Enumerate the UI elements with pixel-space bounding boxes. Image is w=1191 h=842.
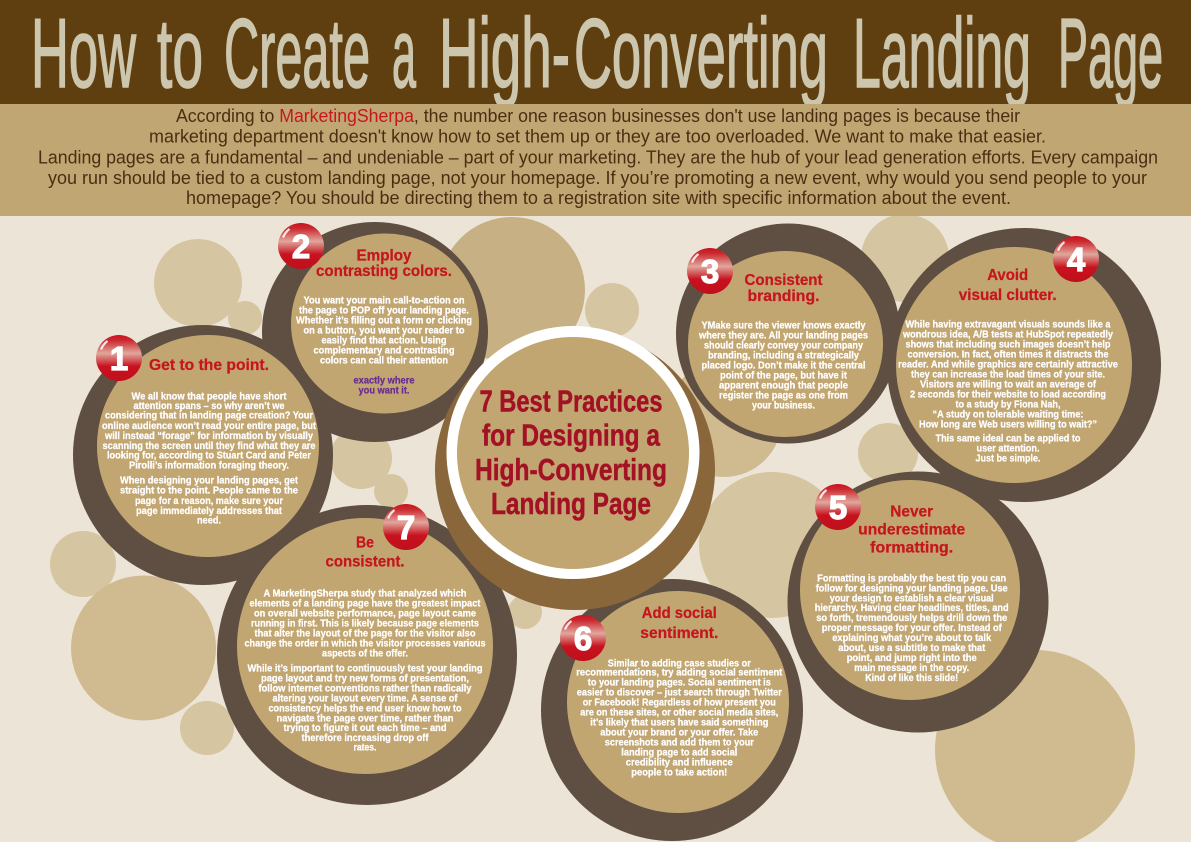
body text 5: hierarchy. Having clear headlines, titles, and bbox=[815, 603, 1009, 614]
body text 1: Pirolli’s information foraging theory. bbox=[129, 461, 289, 472]
body text 1: When designing your landing pages, get bbox=[120, 475, 299, 486]
body text 6: easier to discover – just search through Twitter bbox=[577, 688, 782, 699]
heading 2: contrasting colors. bbox=[316, 263, 452, 280]
body text 1: looking for, according to Stuart Card and Peter bbox=[107, 451, 311, 462]
heading 2: Employ bbox=[356, 248, 412, 265]
body text 4: 2 seconds for their website to load according bbox=[910, 390, 1106, 401]
body text 6: are on these sites, or other social media sites, bbox=[580, 708, 778, 719]
panel 4: avoid visual clutter bbox=[887, 228, 1161, 502]
body text 6: to your landing pages. Social sentiment is bbox=[588, 678, 771, 689]
badge 7: 7 bbox=[397, 509, 415, 546]
body text 3: your business. bbox=[752, 400, 815, 411]
body text 4 bbox=[898, 319, 1118, 465]
body text 6 bbox=[576, 659, 783, 779]
badge 1: 1 bbox=[110, 340, 128, 377]
heading 4: Avoid bbox=[987, 267, 1028, 284]
body text 4: This same ideal can be applied to bbox=[936, 434, 1080, 445]
central heading: Landing Page bbox=[491, 486, 651, 521]
badge 7 bbox=[383, 504, 429, 550]
body text 1: considering that in landing page creation? Your bbox=[105, 411, 313, 422]
body text 5: about, use a subtitle to make that bbox=[838, 643, 986, 654]
badge 1 bbox=[96, 335, 142, 381]
heading 7 bbox=[326, 534, 404, 571]
heading 6 bbox=[640, 605, 718, 642]
central heading: for Designing a bbox=[482, 418, 661, 453]
body text 3: apparent enough that people bbox=[719, 381, 848, 392]
body text 3 bbox=[698, 320, 868, 411]
body text 4: Visitors are willing to wait an average of bbox=[920, 380, 1097, 391]
body text 7: change the order in which the visitor processes various bbox=[244, 639, 486, 650]
background decorative bubbles bbox=[50, 214, 1135, 842]
body text 3: YMake sure the viewer knows exactly bbox=[702, 320, 866, 331]
body text 1: online audience won’t read your entire page, but bbox=[102, 421, 317, 432]
body text 7: consistency helps the end user know how to bbox=[268, 704, 462, 715]
body text 7: rates. bbox=[354, 743, 377, 754]
body text 1: attention spans – so why aren’t we bbox=[134, 401, 285, 412]
body text 7: navigate the page over time, rather than bbox=[276, 714, 454, 725]
intro text band: you run should be tied to a custom landing page, not your homepage. If you’re promoting a new event, why would you send people to your bbox=[48, 168, 1147, 188]
heading 5: Never bbox=[890, 504, 933, 521]
body text 7: follow internet conventions rather than radically bbox=[258, 684, 472, 695]
heading 1: Get to the point. bbox=[149, 357, 269, 374]
body text 5: explaining what you’re about to talk bbox=[832, 633, 992, 644]
panel 2: employ contrasting colors bbox=[262, 222, 488, 442]
body text 1: We all know that people have short bbox=[132, 391, 287, 402]
central heading bbox=[475, 384, 667, 521]
body text 5: your design to establish a clear visual bbox=[830, 594, 994, 605]
body text 2: easily find that action. Using bbox=[322, 335, 446, 346]
panel 1: get to the point bbox=[73, 325, 333, 585]
body text 6: credibility and influence bbox=[626, 758, 733, 769]
body text 1 bbox=[102, 391, 317, 527]
body text 6: it’s likely that users have said something bbox=[590, 718, 768, 729]
title banner: High- bbox=[439, 0, 570, 108]
heading 3 bbox=[744, 272, 822, 305]
title banner: Create bbox=[224, 0, 370, 108]
badge 3: 3 bbox=[701, 253, 719, 290]
body text 4: While having extravagant visuals sounds like a bbox=[906, 319, 1111, 330]
central panel: 7 best practices bbox=[435, 326, 715, 610]
body text 1: page immediately addresses that bbox=[136, 506, 283, 517]
body text 7: While it’s important to continuously test your landing bbox=[248, 664, 482, 675]
body text 5: point, and jump right into the bbox=[847, 653, 977, 664]
body text 1: scanning the screen until they find what they are bbox=[102, 441, 316, 452]
body text 5: Kind of like this slide! bbox=[865, 673, 958, 684]
body text 3: point of the page, but have it bbox=[720, 371, 848, 382]
heading 3: branding. bbox=[748, 288, 820, 305]
panel 5: never underestimate formatting bbox=[788, 472, 1048, 732]
badge 6: 6 bbox=[574, 620, 592, 657]
heading 4: visual clutter. bbox=[959, 287, 1057, 304]
panel 3: consistent branding bbox=[676, 224, 900, 444]
body text 3: where they are. All your landing pages bbox=[698, 330, 868, 341]
body text 2 bbox=[296, 295, 472, 396]
title banner: to bbox=[157, 0, 203, 108]
heading 7: consistent. bbox=[326, 554, 404, 571]
body text 2: you want it. bbox=[358, 385, 410, 396]
body text 5: follow for designing your landing page. Use bbox=[816, 584, 1008, 595]
title banner: a bbox=[392, 0, 416, 108]
body text 7: running in first. This is likely because page elements bbox=[251, 619, 479, 630]
body text 3: placed logo. Don’t make it the central bbox=[702, 361, 866, 372]
body text 4: shows that including such images doesn’t help bbox=[906, 339, 1110, 350]
body text 7: A MarketingSherpa study that analyzed which bbox=[264, 589, 466, 600]
body text 5: main message in the copy. bbox=[854, 663, 969, 674]
title banner: How bbox=[31, 0, 137, 108]
badge 3 bbox=[687, 248, 733, 294]
body text 6: people to take action! bbox=[631, 768, 727, 779]
badge 4: 4 bbox=[1067, 241, 1086, 278]
panel 7: be consistent bbox=[217, 505, 517, 805]
heading 5: underestimate bbox=[858, 522, 966, 539]
heading 3: Consistent bbox=[744, 272, 822, 289]
body text 7: altering your layout every time. A sense of bbox=[272, 694, 458, 705]
body text 1: straight to the point. People came to the bbox=[120, 485, 298, 496]
body text 7: trying to figure it out each time – and bbox=[284, 723, 446, 734]
body text 4: wondrous idea, A/B tests at HubSpot repeatedly bbox=[902, 329, 1113, 340]
heading 4 bbox=[959, 267, 1057, 304]
body text 4: to a study by Fiona Nah, bbox=[956, 399, 1061, 410]
body text 6: or Facebook! Regardless of how present you bbox=[583, 698, 776, 709]
body text 3: branding, including a strategically bbox=[708, 351, 859, 362]
heading 2 bbox=[316, 248, 452, 280]
body text 4: they can increase the load times of your site. bbox=[911, 370, 1105, 381]
body text 5: proper message for your offer. Instead of bbox=[822, 623, 1002, 634]
body text 2: complementary and contrasting bbox=[314, 345, 454, 356]
body text 6: landing page to add social bbox=[621, 748, 737, 759]
body text 2: on a button, you want your reader to bbox=[304, 325, 464, 336]
body text 7 bbox=[244, 589, 486, 754]
body text 5: so forth, tremendously helps drill down the bbox=[816, 613, 1008, 624]
intro text band: marketing department doesn't know how to set them up or they are too overloaded. We want to make that easier. bbox=[149, 126, 1046, 146]
badge 4 bbox=[1053, 236, 1099, 282]
body text 7: page layout and try new forms of presentation, bbox=[261, 674, 469, 685]
body text 6: screenshots and add them to your bbox=[605, 738, 754, 749]
body text 2: Whether it’s filling out a form or clicking bbox=[296, 315, 472, 326]
intro text band: homepage? You should be directing them to a registration site with specific information about the event. bbox=[186, 188, 1011, 208]
central heading: High-Converting bbox=[475, 452, 667, 487]
badge 2: 2 bbox=[292, 228, 310, 265]
body text 7: on overall website performance, page layout came bbox=[254, 609, 476, 620]
body text 6: recommendations, try adding social sentiment bbox=[576, 668, 783, 679]
central heading: 7 Best Practices bbox=[480, 384, 662, 419]
heading 7: Be bbox=[356, 534, 374, 551]
intro text band bbox=[0, 104, 1191, 216]
body text 5 bbox=[815, 574, 1009, 684]
intro text band: According to MarketingSherpa, the number one reason businesses don't use landing pages is because their bbox=[176, 106, 1020, 126]
panel 6: add social sentiment bbox=[541, 579, 803, 841]
body text 1: will instead “forage” for information by visually bbox=[104, 431, 313, 442]
badge 5: 5 bbox=[829, 489, 847, 526]
body text 4: “A study on tolerable waiting time: bbox=[932, 409, 1084, 420]
intro text band: Landing pages are a fundamental – and undeniable – part of your marketing. They are the hub of your lead generation efforts. Every campaign bbox=[38, 147, 1158, 167]
body text 7: aspects of the offer. bbox=[322, 649, 408, 660]
body text 6: about your brand or your offer. Take bbox=[600, 728, 759, 739]
body text 4: Just be simple. bbox=[976, 454, 1041, 465]
body text 2: exactly where bbox=[354, 375, 415, 386]
badge 5 bbox=[815, 484, 861, 530]
body text 4: How long are Web users willing to wait?” bbox=[919, 419, 1097, 430]
badge 2 bbox=[278, 223, 324, 269]
title banner: Converting bbox=[574, 0, 828, 108]
heading 5 bbox=[858, 504, 966, 557]
body text 7: elements of a landing page have the greatest impact bbox=[250, 599, 481, 610]
body text 3: should clearly convey your company bbox=[704, 341, 863, 352]
heading 5: formatting. bbox=[870, 540, 953, 557]
heading 6: sentiment. bbox=[640, 625, 718, 642]
body text 1: need. bbox=[197, 516, 221, 527]
badge 6 bbox=[560, 615, 606, 661]
body text 5: Formatting is probably the best tip you can bbox=[817, 574, 1006, 585]
body text 7: that alter the layout of the page for the visitor also bbox=[254, 629, 476, 640]
title banner bbox=[0, 0, 1191, 108]
body text 4: conversion. In fact, often times it distracts the bbox=[908, 349, 1109, 360]
body text 2: colors can call their attention bbox=[320, 355, 448, 366]
body text 1: page for a reason, make sure your bbox=[135, 496, 283, 507]
body text 6: Similar to adding case studies or bbox=[608, 659, 751, 670]
body text 4: user attention. bbox=[976, 444, 1040, 455]
body text 2: the page to POP off your landing page. bbox=[299, 305, 469, 316]
body text 2: You want your main call-to-action on bbox=[304, 295, 464, 306]
heading 6: Add social bbox=[642, 605, 717, 622]
body text 4: reader. And while graphics are certainly attractive bbox=[898, 360, 1118, 371]
body text 7: therefore increasing drop off bbox=[302, 733, 429, 744]
body text 3: register the page as one from bbox=[719, 390, 848, 401]
